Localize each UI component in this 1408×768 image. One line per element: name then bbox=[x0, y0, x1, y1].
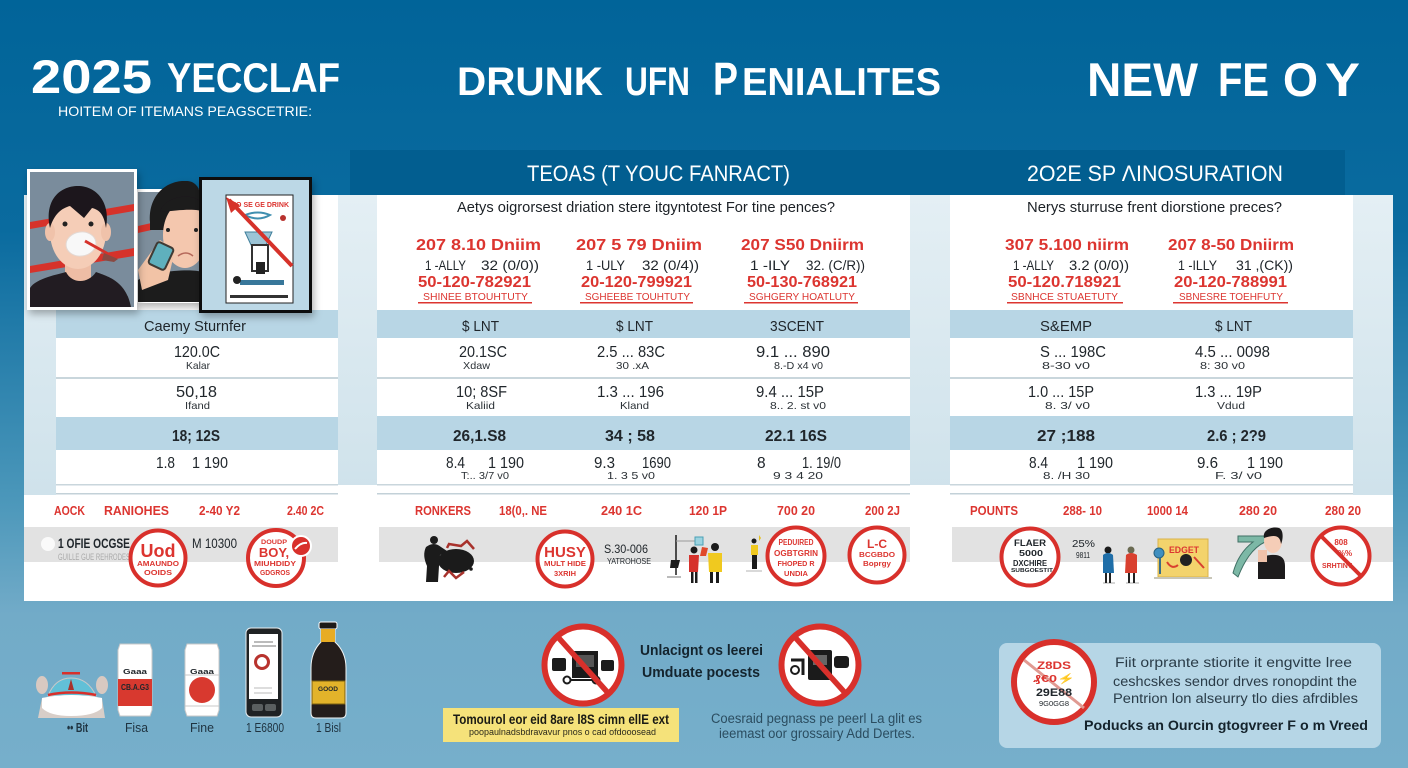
text: strip value bbox=[604, 544, 651, 566]
table rows: middle column: Xdaw bbox=[463, 360, 490, 372]
penalty block: column 2: SGHEEBE TOUHTUTY bbox=[585, 291, 690, 303]
table rows: middle column: T:.. 3/7 v0 bbox=[461, 470, 509, 482]
sign: prohibited year: ₰€0⚡ bbox=[1033, 672, 1075, 685]
stamp: penalty notice: FHOPED R bbox=[778, 559, 815, 568]
main title center: ENIALITES bbox=[742, 61, 941, 104]
penalty row: middle labels: 240 1C bbox=[601, 503, 643, 518]
icon: breath test can one bbox=[118, 644, 152, 716]
sign: prohibited year: 29E88 bbox=[1036, 687, 1072, 699]
table rows: right column: 4.5 ... 0098 bbox=[1195, 344, 1270, 361]
penalty row: middle labels: 18(0,. NE bbox=[499, 503, 547, 518]
table rows: middle column: 22.1 16S bbox=[765, 428, 827, 445]
text: strip value: S.30-006 bbox=[604, 544, 648, 556]
table rows: right column: 9.6 bbox=[1197, 455, 1218, 472]
table rows: middle column: 3SCENT bbox=[770, 318, 824, 335]
stamp: penalty notice: OGBTGRIN bbox=[774, 549, 818, 558]
penalty block: column 2 bbox=[576, 237, 702, 304]
penalty block: column 1 bbox=[416, 237, 541, 304]
table rows: middle column: 20.1SC bbox=[459, 344, 507, 361]
panel: lower right card bbox=[999, 642, 1381, 748]
table rows: middle column: 1. 19/0 bbox=[802, 455, 841, 472]
main title right: O bbox=[1283, 53, 1318, 106]
stamp: L-C: Boprgy bbox=[863, 559, 892, 568]
penalty row: right labels: 280 20 bbox=[1239, 503, 1277, 518]
penalty block: column 3: 50-130-768921 bbox=[747, 274, 857, 291]
text: lower centre note: ieemast oor grossairy Add Dertes. bbox=[719, 726, 915, 741]
panel: lower right card: ceshcskes sendor drves ronopdint the bbox=[1113, 674, 1357, 689]
callout: yellow note: Tomourol eor eid 8are l8S cimn ellE ext bbox=[453, 712, 669, 727]
table rows: middle column: 9 3 4 20 bbox=[773, 470, 823, 482]
penalty row: left labels: 2.40 2C bbox=[287, 503, 324, 518]
penalty block: column 3 bbox=[741, 237, 865, 304]
table rows: right column: $ LNT bbox=[1215, 318, 1252, 335]
table rows: right column bbox=[1028, 318, 1283, 482]
table rows: middle column: 1. 3 5 v0 bbox=[607, 470, 655, 482]
icon labels: Fine bbox=[190, 721, 214, 735]
penalty block: right column 1: 3.2 (0/0)) bbox=[1069, 257, 1129, 273]
stamp: black text notice: 5000 bbox=[1019, 548, 1043, 558]
icon: bottle: GOOD bbox=[318, 687, 339, 693]
panel: left column: Ifand bbox=[185, 400, 210, 412]
main title right: NEW bbox=[1087, 53, 1199, 106]
panel: table background bbox=[24, 195, 1393, 601]
penalty row: middle labels: 200 2J bbox=[865, 503, 900, 518]
stamp: prohibition percent: %% bbox=[1338, 549, 1352, 558]
stamp: black text notice: DXCHIRE bbox=[1013, 558, 1047, 568]
panel: left column: Kalar bbox=[186, 360, 210, 372]
panel: header band: 2O2E SP ΛINOSURATION bbox=[1027, 161, 1283, 186]
penalty strip: grey bands bbox=[24, 527, 1393, 562]
penalty row: middle labels: 700 20 bbox=[777, 503, 815, 518]
table rows: right column: 8. /H 30 bbox=[1043, 470, 1090, 482]
photo: no drinking poster: NO SE GE DRINK bbox=[231, 202, 289, 209]
table rows: middle column bbox=[446, 318, 841, 482]
icon: breath test can one: CB.A.G3 bbox=[121, 683, 149, 692]
penalty row: middle labels bbox=[415, 503, 900, 518]
penalty row: middle labels: RONKERS bbox=[415, 503, 471, 518]
icon: small yellow figure bbox=[746, 535, 762, 571]
penalty block: column 3: 207 S50 Dniirm bbox=[741, 237, 864, 254]
text: lower centre note bbox=[711, 711, 922, 741]
left strip text bbox=[41, 535, 237, 562]
stamp: penalty notice: UNDIA bbox=[784, 569, 809, 578]
table rows: middle column: 8.4 bbox=[446, 455, 465, 472]
main title center bbox=[457, 53, 941, 105]
penalty block: column 1: SHINEE BTOUHTUTY bbox=[423, 291, 528, 303]
stamp: Uod: AMAUNDO bbox=[137, 559, 179, 568]
text: percentage: 9811 bbox=[1076, 551, 1090, 560]
penalty block: right column 1: SBNHCE STUAETUTY bbox=[1011, 291, 1118, 303]
panel: left column: Caemy Sturnfer bbox=[144, 318, 246, 335]
stamp: BOY with badge: BOY, bbox=[259, 545, 289, 560]
stamp: L-C bbox=[850, 528, 904, 582]
penalty block: right column 2: 1 -ILLY bbox=[1178, 257, 1218, 273]
table rows: right column: Vdud bbox=[1217, 400, 1245, 412]
penalty row: right labels: 280 20 bbox=[1325, 503, 1361, 518]
penalty row: left labels: RANIOHES bbox=[104, 503, 169, 518]
stamp: HUSY: MULT HIDE bbox=[544, 559, 586, 568]
photo: person with phone bbox=[137, 181, 207, 303]
penalty block: column 3: 1 -ILY bbox=[750, 257, 791, 273]
left strip text: GUILLE GUE REHRODES bbox=[58, 552, 130, 562]
table rows: middle column: 2.5 ... 83C bbox=[597, 344, 665, 361]
icon labels: 1 E6800 bbox=[246, 721, 284, 735]
penalty block: right column 2: SBNESRE TOEHFUTY bbox=[1179, 291, 1283, 303]
icon: man with teal figure seven bbox=[1233, 527, 1285, 579]
table rows: middle column: 8.-D x4 v0 bbox=[774, 360, 823, 372]
penalty row: left labels: 2-40 Y2 bbox=[199, 503, 240, 518]
table rows: right column: 2.6 ; 2?9 bbox=[1207, 428, 1266, 445]
text: percentage: 25% bbox=[1072, 539, 1095, 550]
main title center: DRUNK bbox=[457, 60, 603, 104]
icon: two standing figures bbox=[1103, 546, 1139, 583]
stamp: penalty notice: PEDUIRED bbox=[778, 538, 814, 547]
icon: officer with black oval bbox=[424, 536, 474, 582]
panel: middle column: Aetys oigrorsest driation stere itgyntotest For tine pences? bbox=[457, 200, 835, 216]
table rows: right column: S&EMP bbox=[1040, 318, 1092, 335]
main title right bbox=[1087, 53, 1360, 106]
stamp: HUSY: 3XRIH bbox=[554, 571, 576, 578]
penalty block: right column 2: 31 ,(CK)) bbox=[1236, 257, 1293, 273]
penalty row: middle labels: 120 1P bbox=[689, 503, 727, 518]
table rows: right column: S ... 198C bbox=[1040, 344, 1106, 361]
table rows: middle column: 9.3 bbox=[594, 455, 615, 472]
panel: left column: 120.0C bbox=[174, 344, 220, 361]
table rows: middle column: 30 .xA bbox=[616, 360, 649, 372]
table rows: middle column: 1.3 ... 196 bbox=[597, 384, 664, 401]
stamp: black text notice bbox=[1002, 528, 1058, 586]
penalty block: right column 2 bbox=[1168, 237, 1294, 304]
penalty block: column 2: 1 -ULY bbox=[586, 257, 626, 273]
icon: yellow warning board with magnifier bbox=[1154, 539, 1212, 578]
penalty row: right labels: 288- 10 bbox=[1063, 503, 1102, 518]
text: lower centre note: Coesraid pegnass pe peerl La glit es bbox=[711, 711, 922, 726]
stamp: Uod: OOIDS bbox=[144, 568, 172, 577]
main title left: HOITEM OF ITEMANS PEAGSCETRIE: bbox=[58, 103, 312, 119]
sign: no vehicles bbox=[544, 626, 622, 704]
panel: header band: TEOAS (T YOUC FANRACT) bbox=[527, 161, 790, 186]
icon: bottle bbox=[311, 622, 346, 718]
panel: middle column bbox=[377, 195, 910, 495]
main title right: FE bbox=[1218, 53, 1269, 106]
stamp: prohibition percent bbox=[1312, 528, 1370, 584]
panel: left column: 1 190 bbox=[192, 455, 228, 472]
table rows: middle column: $ LNT bbox=[462, 318, 499, 335]
penalty block: right column 1: 1 -ALLY bbox=[1013, 257, 1055, 273]
panel: left column: 50,18 bbox=[176, 384, 217, 401]
text: strip value: YATROHOSE bbox=[607, 557, 651, 566]
stamp: prohibition percent: 808 bbox=[1334, 538, 1348, 547]
icon labels: •• Bit bbox=[67, 721, 89, 735]
stamp: HUSY bbox=[538, 532, 592, 586]
text: percentage bbox=[1072, 539, 1095, 560]
icon labels: Fisa bbox=[125, 721, 148, 735]
table rows: right column: 27 ;188 bbox=[1037, 428, 1095, 445]
table rows: right column: 1 190 bbox=[1077, 455, 1113, 472]
stamp: black text notice: SUBGOESTIT bbox=[1011, 568, 1054, 574]
panel: left column: 1.8 bbox=[156, 455, 175, 472]
icon: yellow warning board with magnifier: EDGET bbox=[1169, 545, 1199, 555]
table rows: right column: 8.4 bbox=[1029, 455, 1048, 472]
panel: right column: Nerys sturruse frent diorstione preces? bbox=[1027, 200, 1282, 216]
table rows: right column: 8-30 v0 bbox=[1042, 360, 1090, 372]
main title left: 2025 bbox=[31, 50, 152, 103]
photo: person with breath test bbox=[27, 169, 137, 310]
penalty row: left labels bbox=[54, 503, 324, 518]
photo: no drinking poster bbox=[199, 177, 312, 313]
sign: prohibited year: Z8DS bbox=[1037, 660, 1071, 672]
table rows: right column: 1.3 ... 19P bbox=[1195, 384, 1262, 401]
stamp: penalty notice bbox=[768, 528, 824, 584]
penalty row: right labels: POUNTS bbox=[970, 503, 1018, 518]
stamp: L-C: L-C bbox=[867, 537, 887, 551]
text: sign caption: Unlacignt os leerei bbox=[640, 643, 763, 659]
left strip text: M 10300 bbox=[192, 535, 237, 551]
table rows: middle column: 26,1.S8 bbox=[453, 428, 506, 445]
penalty block: column 2: 207 5 79 Dniim bbox=[576, 237, 702, 254]
icon: car bbox=[36, 672, 108, 718]
stamp: BOY with badge: DOUDP bbox=[261, 539, 288, 546]
penalty block: column 1: 50-120-782921 bbox=[418, 274, 531, 291]
panel: header band bbox=[350, 150, 1345, 195]
sign: no devices bbox=[782, 626, 858, 704]
panel: lower right card: Poducks an Ourcin gtogvreer F o m Vreed bbox=[1084, 717, 1368, 733]
penalty block: column 1: 1 -ALLY bbox=[425, 257, 467, 273]
table rows: right column: 8: 30 v0 bbox=[1200, 360, 1245, 372]
table rows: middle column: $ LNT bbox=[616, 318, 653, 335]
stamp: Uod bbox=[130, 530, 186, 586]
penalty row: left labels: AOCK bbox=[54, 503, 85, 518]
icon labels bbox=[67, 721, 341, 735]
panel: left column: 18; 12S bbox=[172, 428, 220, 445]
stamp: black text notice: FLAER bbox=[1014, 538, 1047, 548]
table rows: middle column: Kaliid bbox=[466, 400, 495, 412]
penalty block: column 1: 32 (0/0)) bbox=[481, 257, 539, 273]
icon: breath test can two: Gaaa bbox=[190, 669, 214, 676]
callout: yellow note: poopaulnadsbdravavur pnos o cad ofdooosead bbox=[469, 727, 656, 737]
table rows: middle column: 8 bbox=[757, 455, 766, 472]
table rows: right column: 1.0 ... 15P bbox=[1028, 384, 1094, 401]
main title center: P bbox=[713, 53, 738, 105]
stamp: HUSY: HUSY bbox=[544, 544, 586, 561]
main title center: UFN bbox=[625, 60, 690, 104]
penalty block: column 3: 32. (C/R)) bbox=[806, 257, 865, 273]
stamp: Uod: Uod bbox=[140, 541, 176, 561]
table rows: right column: 8. 3/ v0 bbox=[1045, 400, 1090, 412]
table rows: middle column: 8.. 2. st v0 bbox=[770, 400, 826, 412]
table rows: middle column: 1 190 bbox=[488, 455, 524, 472]
penalty block: column 3: SGHGERY HOATLUTY bbox=[749, 291, 855, 303]
panel: left column bbox=[56, 195, 338, 495]
panel: lower right card: Pentrion lon alseurry tlo dies afrdibles bbox=[1113, 691, 1358, 706]
table rows: right column: 1 190 bbox=[1247, 455, 1283, 472]
stamp: BOY with badge: GDGROS bbox=[260, 570, 290, 577]
table rows: middle column: 10; 8SF bbox=[456, 384, 507, 401]
stamp: prohibition percent: SRHTINT bbox=[1322, 561, 1352, 570]
penalty block: right column 2: 207 8-50 Dniirm bbox=[1168, 237, 1294, 254]
text: sign caption bbox=[640, 643, 763, 681]
main title right: Y bbox=[1325, 53, 1360, 106]
icon: people at screen bbox=[667, 535, 722, 583]
penalty block: right column 1 bbox=[1005, 237, 1129, 304]
penalty block: column 1: 207 8.10 Dniim bbox=[416, 237, 541, 254]
penalty block: column 2: 20-120-799921 bbox=[581, 274, 692, 291]
stamp: L-C: BCGBDO bbox=[859, 550, 895, 559]
table rows: middle column: 1690 bbox=[642, 455, 671, 472]
stamp: BOY with badge: MIUHDIDY bbox=[254, 561, 296, 568]
sign: prohibited year: 9G0GG8 bbox=[1039, 701, 1069, 708]
penalty row: right labels: 1000 14 bbox=[1147, 503, 1189, 518]
main title left bbox=[31, 50, 340, 119]
penalty block: right column 1: 50-120.718921 bbox=[1008, 274, 1121, 291]
table rows: middle column: 9.1 ... 890 bbox=[756, 344, 830, 361]
penalty block: column 2: 32 (0/4)) bbox=[642, 257, 699, 273]
penalty row: right labels bbox=[970, 503, 1361, 518]
icon: breath test can one: Gaaa bbox=[123, 669, 147, 676]
table rows: middle column: 34 ; 58 bbox=[605, 428, 655, 445]
callout: yellow note bbox=[443, 708, 679, 742]
icon: phone bbox=[246, 628, 282, 717]
panel: right column bbox=[950, 195, 1353, 495]
table rows: middle column: Kland bbox=[620, 400, 649, 412]
main title left: YECCLAF bbox=[167, 54, 340, 101]
penalty block: right column 2: 20-120-788991 bbox=[1174, 274, 1287, 291]
table rows: right column: F. 3/ v0 bbox=[1215, 470, 1262, 482]
icon: breath test can two bbox=[185, 644, 219, 716]
icon labels: 1 Bisl bbox=[316, 721, 341, 735]
table rows: middle column: 9.4 ... 15P bbox=[756, 384, 824, 401]
sign: prohibited year bbox=[1014, 642, 1094, 722]
panel: lower right card: Fiit orprante stiorite it engvitte lree bbox=[1115, 655, 1352, 670]
text: sign caption: Umduate pocests bbox=[642, 665, 760, 681]
left strip text: 1 OFIE OCGSE bbox=[58, 535, 130, 551]
penalty block: right column 1: 307 5.100 niirm bbox=[1005, 237, 1129, 254]
stamp: BOY with badge bbox=[248, 530, 311, 586]
